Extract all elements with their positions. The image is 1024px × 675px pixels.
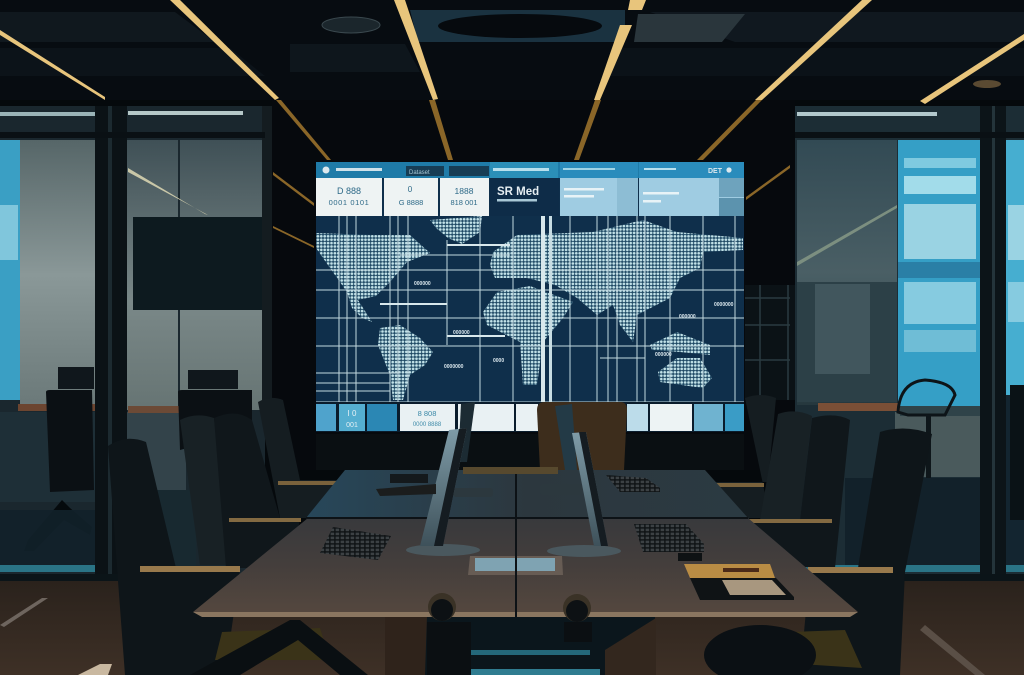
light blue cards xyxy=(560,178,744,216)
dark headline card xyxy=(490,178,559,216)
bright windows xyxy=(898,140,980,410)
header bar xyxy=(316,162,744,178)
wall TV xyxy=(133,217,262,310)
central dark wall xyxy=(272,100,795,470)
front monitor left xyxy=(406,544,480,556)
table items xyxy=(376,467,558,496)
table: back section xyxy=(306,470,748,518)
map labels: 0000000 xyxy=(714,302,734,308)
map labels: 000000 xyxy=(679,314,696,320)
front chair left xyxy=(108,439,240,675)
North America xyxy=(316,233,430,322)
map labels: 000000 xyxy=(655,352,672,358)
map grid lines xyxy=(316,255,744,402)
bottom floor xyxy=(0,574,1024,675)
KPI cards: 1888 xyxy=(455,186,474,196)
header bar: DET xyxy=(708,168,723,175)
bottom tile row xyxy=(316,402,744,432)
KPI cards: 0001 0101 xyxy=(329,198,369,207)
far desk and chair right xyxy=(895,412,980,477)
back monitor left xyxy=(458,402,475,462)
table base xyxy=(190,616,656,675)
map labels: 0000 xyxy=(493,358,504,364)
KPI cards: 0 xyxy=(408,185,413,194)
wall rack right xyxy=(745,285,795,400)
bottom tile row: 001 xyxy=(346,422,358,429)
dotted world map xyxy=(316,216,743,400)
ceiling xyxy=(0,0,1024,105)
chairs left side xyxy=(108,398,345,675)
monitors on table xyxy=(406,402,621,557)
far centre chair xyxy=(537,402,627,470)
map labels: 000000 xyxy=(414,281,431,287)
header bar: Dataset xyxy=(409,170,430,176)
Australia xyxy=(658,358,712,388)
dark headline card: SR Med xyxy=(497,186,539,198)
South-east Asia islands xyxy=(650,332,710,355)
keyboards xyxy=(320,475,704,560)
South America xyxy=(378,325,433,400)
KPI cards xyxy=(316,178,489,216)
glass building reflection xyxy=(797,282,897,402)
ceiling dome xyxy=(438,14,602,38)
table: front section xyxy=(193,470,858,617)
ceiling spot xyxy=(973,80,1001,88)
KPI cards: G 8888 xyxy=(399,198,423,207)
bottom tile row: 0000 8888 xyxy=(413,422,442,428)
display background xyxy=(316,162,744,432)
map labels: 0000000 xyxy=(444,364,464,370)
ceiling speaker xyxy=(322,17,380,33)
wall display: world map dashboard xyxy=(316,162,744,432)
lower gold reflections on wall xyxy=(273,100,790,248)
right meeting room through glass xyxy=(795,105,1024,575)
left meeting room through glass xyxy=(0,105,265,575)
bottom tile row: 8 808 xyxy=(418,409,436,418)
centre power module xyxy=(468,556,563,575)
KPI cards: 818 001 xyxy=(450,198,478,207)
far desks and chairs xyxy=(58,367,94,389)
Europe and Asia xyxy=(490,220,743,342)
microphones on table edge xyxy=(427,593,592,675)
monitor feet back xyxy=(453,488,493,497)
glass pillars xyxy=(0,100,1024,578)
KPI cards: D 888 xyxy=(337,186,361,196)
gold ceiling light strips xyxy=(0,0,1024,104)
notebook and tablet xyxy=(678,553,794,600)
bottom tile row: I 0 xyxy=(348,409,357,418)
back monitor right xyxy=(555,404,577,470)
ceiling vent xyxy=(634,14,745,42)
floor left xyxy=(0,510,96,568)
back chair left 3 xyxy=(258,398,345,518)
map labels: 000000 xyxy=(453,330,470,336)
front monitor right xyxy=(547,545,621,557)
back chair left 2 xyxy=(180,415,230,565)
Africa xyxy=(483,286,573,385)
map labels xyxy=(414,281,734,370)
chairs right side xyxy=(704,395,932,675)
Greenland xyxy=(430,216,482,244)
under-display cabinet xyxy=(316,434,744,470)
